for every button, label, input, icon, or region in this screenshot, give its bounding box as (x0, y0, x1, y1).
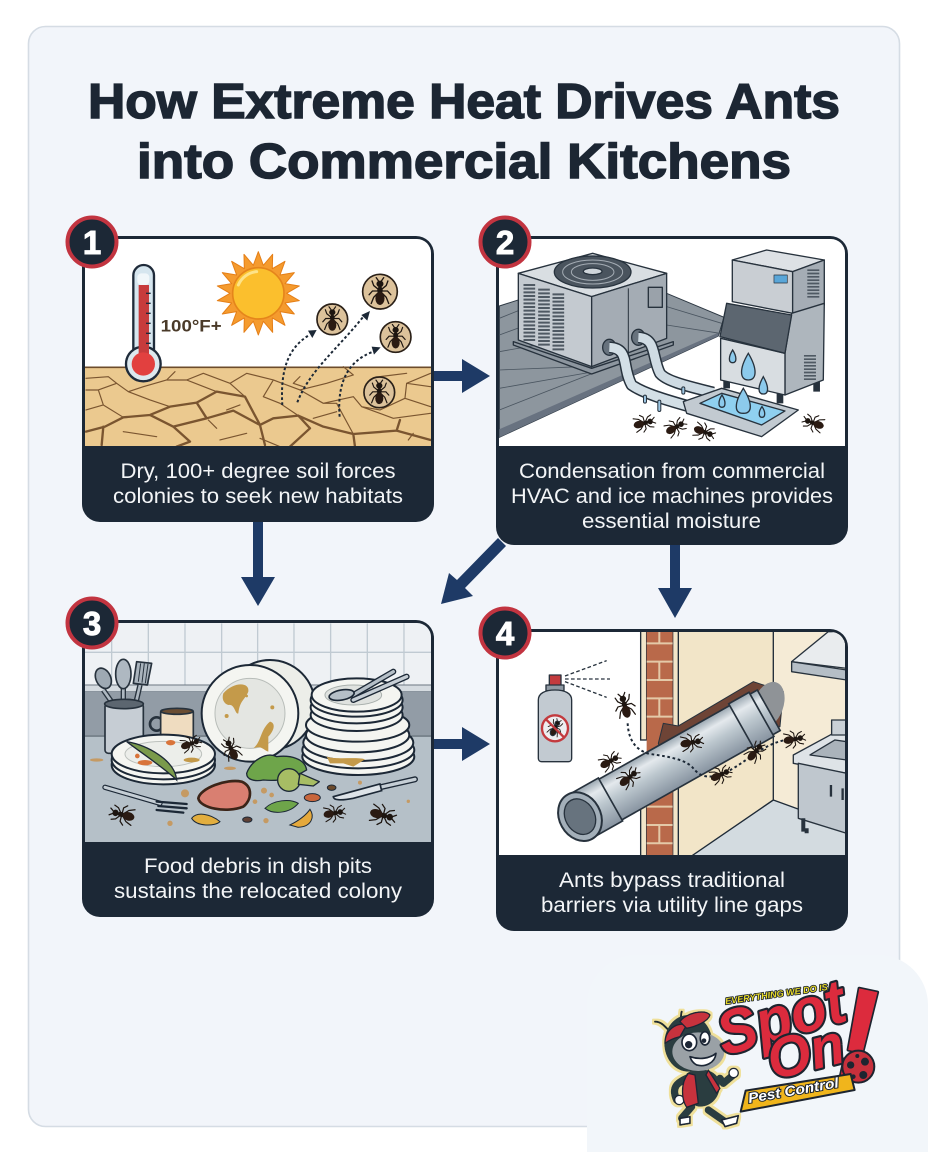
caption: colonies to seek new habitats (113, 485, 403, 508)
illustration: dirty dishes and food debris (82, 620, 434, 844)
wordmark (709, 958, 896, 1110)
wordmark: EVERYTHING WE DO IS (725, 982, 828, 1006)
back plates (202, 660, 315, 762)
left plate stack (112, 735, 215, 784)
right plate stack (302, 678, 414, 775)
title: into Commercial Kitchens (137, 135, 791, 189)
panel: step 3 dish pit (82, 620, 434, 917)
badge 4: 4 (496, 615, 515, 652)
sink cabinet (793, 720, 847, 833)
fork and knife (105, 779, 415, 813)
meat (198, 781, 250, 810)
caption: Food debris in dish pits (144, 855, 372, 878)
pipe (550, 688, 781, 849)
range hood (792, 632, 847, 680)
wordmark: ! (823, 958, 896, 1110)
title (88, 75, 840, 189)
badge 3: 3 (83, 605, 101, 642)
caption: HVAC and ice machines provides (511, 485, 833, 508)
badge 2: 2 (496, 224, 514, 261)
badge 4 (480, 608, 530, 658)
wordmark: Spot (709, 966, 856, 1069)
arrow: step 3 to step 4 (434, 727, 490, 761)
ant medallions (317, 274, 411, 408)
thermometer (126, 265, 161, 381)
mascot (655, 1012, 738, 1127)
water drops (719, 350, 768, 417)
badge 1: 1 (83, 224, 101, 261)
scraps (192, 785, 336, 827)
illustration: pipe through wall (496, 629, 848, 857)
illustration: HVAC unit and ice machine (496, 236, 848, 448)
food stains (223, 684, 274, 752)
badge 2 (480, 218, 530, 266)
panel: step 4 utility gaps (496, 629, 848, 931)
caption: Ants bypass traditional (559, 869, 785, 892)
ants (632, 414, 656, 433)
arrow: step 2 to step 4 (658, 545, 692, 618)
arrow: step 1 to step 3 (241, 522, 275, 606)
caption (511, 460, 833, 533)
salad (247, 755, 319, 791)
wall gap (658, 681, 784, 745)
caption: Dry, 100+ degree soil forces (120, 460, 396, 483)
spray can (538, 675, 572, 762)
logo: Spot On Pest Control (655, 958, 896, 1127)
wall and floor (641, 630, 847, 857)
banner: Pest Control (747, 1074, 841, 1106)
sun (217, 252, 299, 335)
caption (113, 460, 403, 508)
ice machine (720, 250, 824, 403)
illustration: dry cracked soil, thermometer, sun (82, 236, 434, 448)
mug (150, 708, 193, 740)
ants (108, 804, 136, 826)
logo panel (587, 955, 928, 1152)
temperature label: 100°F+ (161, 317, 222, 336)
panel: step 2 condensation (496, 236, 848, 545)
arrow: step 1 to step 2 (434, 359, 490, 393)
caption: Condensation from commercial (519, 460, 825, 483)
caption: essential moisture (582, 510, 761, 533)
caption (114, 855, 403, 903)
badge 1 (68, 218, 116, 266)
title: How Extreme Heat Drives Ants (88, 75, 840, 129)
utensils on stack (328, 672, 407, 702)
banner (741, 1074, 855, 1112)
caption: sustains the relocated colony (114, 880, 403, 903)
dotted migration arrows (282, 317, 373, 417)
caption: barriers via utility line gaps (541, 894, 803, 917)
utensil cup (92, 659, 152, 753)
condensate pipes (603, 329, 713, 410)
roof deck (499, 293, 724, 437)
spray dashes (565, 661, 610, 697)
arrow: step 2 to step 3 (441, 538, 506, 604)
panel: step 1 heat and dry soil (82, 236, 434, 522)
water tray (683, 388, 798, 437)
HVAC unit (513, 253, 673, 374)
caption (541, 869, 803, 917)
wordmark: On (761, 1013, 851, 1093)
ladybug ball (842, 1051, 874, 1083)
ants on pipe (612, 691, 638, 720)
ant trail (628, 723, 785, 777)
badge 3 (68, 598, 116, 648)
